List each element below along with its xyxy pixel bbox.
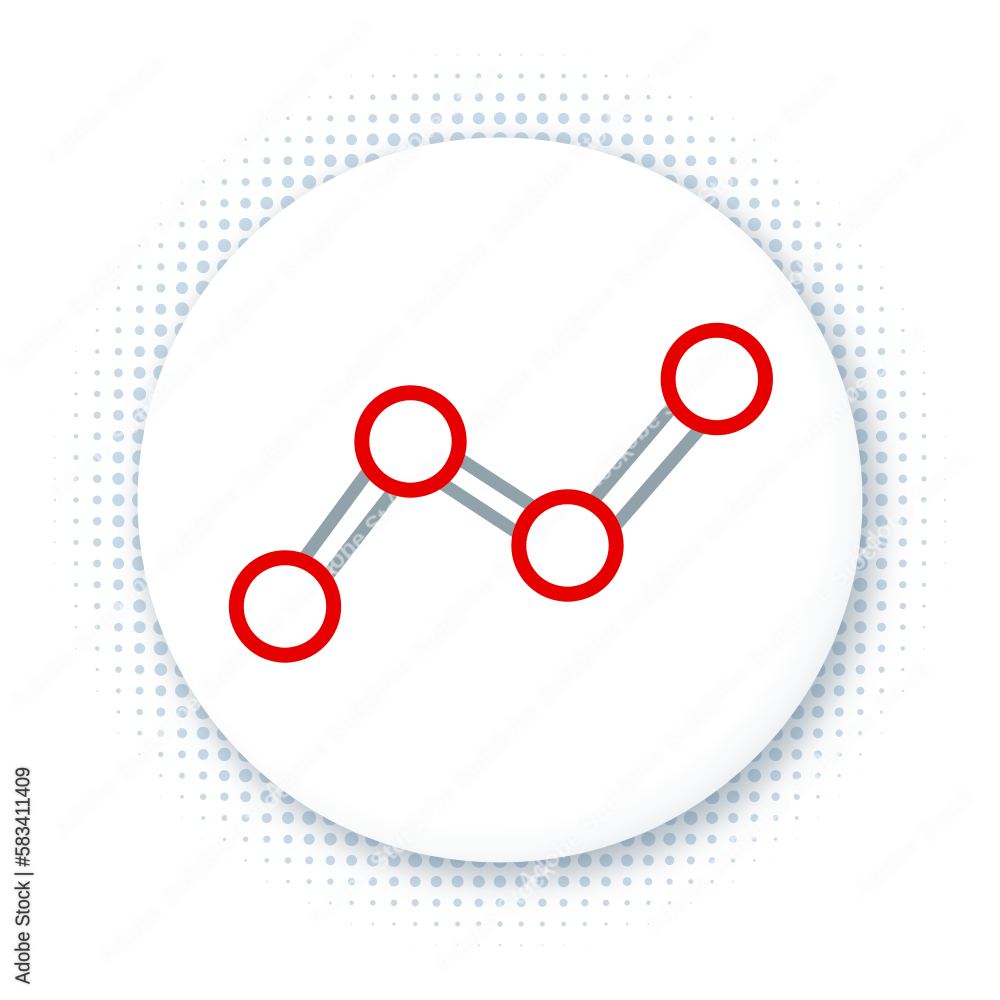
watermark pattern: Adobe Stock bbox=[341, 601, 473, 725]
watermark pattern: Adobe Stock bbox=[380, 392, 512, 516]
watermark pattern: Adobe Stock bbox=[258, 683, 390, 807]
watermark pattern: Adobe Stock bbox=[673, 273, 805, 397]
halftone dot ring background bbox=[54, 54, 946, 946]
watermark pattern: Adobe Stock bbox=[507, 437, 639, 561]
watermark pattern: Adobe Stock bbox=[297, 474, 429, 598]
watermark pattern: Adobe Stock bbox=[585, 19, 717, 143]
watermark pattern: Adobe Stock bbox=[629, 146, 761, 270]
watermark pattern: Adobe Stock bbox=[678, 609, 810, 733]
white circular badge with drop shadow bbox=[138, 138, 862, 862]
watermark pattern: Adobe Stock bbox=[805, 654, 937, 778]
watermark pattern: Adobe Stock bbox=[82, 175, 214, 299]
watermark pattern: Adobe Stock bbox=[639, 818, 771, 942]
watermark pattern: Adobe Stock bbox=[761, 527, 893, 651]
watermark pattern: Adobe Stock bbox=[419, 183, 551, 307]
watermark pattern: Adobe Stock bbox=[375, 56, 507, 180]
watermark pattern: Adobe Stock bbox=[595, 691, 727, 815]
watermark pattern: Adobe Stock bbox=[385, 728, 517, 852]
node 1 bbox=[236, 558, 334, 655]
watermark pattern: Adobe Stock bbox=[839, 109, 971, 233]
watermark pattern: Adobe Stock bbox=[844, 445, 976, 569]
watermark pattern: Adobe Stock bbox=[170, 429, 302, 553]
watermark pattern: Adobe Stock bbox=[0, 257, 131, 381]
watermark pattern: Adobe Stock bbox=[512, 773, 644, 897]
watermark pattern: Adobe Stock bbox=[849, 781, 981, 905]
watermark pattern: Adobe Stock bbox=[87, 511, 219, 635]
watermark pattern: Adobe Stock bbox=[336, 265, 468, 389]
connector: node 2 to node 3 bbox=[443, 458, 532, 532]
watermark pattern: Adobe Stock bbox=[292, 138, 424, 262]
watermark pattern: Adobe Stock bbox=[126, 302, 258, 426]
watermark pattern: Adobe Stock bbox=[722, 736, 854, 860]
watermark pattern: Adobe Stock bbox=[634, 482, 766, 606]
watermark pattern: Adobe Stock bbox=[43, 384, 175, 508]
watermark pattern: Adobe Stock bbox=[800, 318, 932, 442]
watermark pattern: Adobe Stock bbox=[38, 48, 170, 172]
watermark pattern: Adobe Stock bbox=[248, 11, 380, 135]
watermark pattern: Adobe Stock bbox=[551, 564, 683, 688]
watermark pattern: Adobe Stock bbox=[48, 720, 180, 844]
watermark pattern: Adobe Stock bbox=[165, 93, 297, 217]
watermark pattern: Adobe Stock bbox=[424, 519, 556, 643]
watermark pattern: Adobe Stock bbox=[590, 355, 722, 479]
node 4 bbox=[668, 330, 766, 428]
watermark pattern: Adobe Stock bbox=[209, 220, 341, 344]
node 3 bbox=[519, 497, 616, 594]
node 2 bbox=[362, 393, 459, 490]
watermark pattern: Adobe Stock bbox=[302, 810, 434, 934]
connector: node 3 to node 4 bbox=[594, 408, 700, 525]
watermark pattern: Adobe Stock bbox=[468, 646, 600, 770]
watermark pattern: Adobe Stock bbox=[463, 310, 595, 434]
watermark pattern: Adobe Stock bbox=[92, 847, 224, 971]
watermark pattern: Adobe Stock bbox=[214, 556, 346, 680]
watermark pattern: Adobe Stock bbox=[175, 765, 307, 889]
watermark pattern: Adobe Stock bbox=[4, 593, 136, 717]
watermark pattern: Adobe Stock bbox=[502, 101, 634, 225]
watermark pattern: Adobe Stock bbox=[546, 228, 678, 352]
watermark pattern: Adobe Stock bbox=[429, 855, 561, 979]
watermark pattern: Adobe Stock bbox=[712, 64, 844, 188]
watermark pattern: Adobe Stock bbox=[717, 400, 849, 524]
connector: node 1 to node 2 bbox=[303, 473, 393, 575]
vertical stock id caption: Adobe Stock | #583411409 bbox=[12, 767, 34, 984]
watermark pattern: Adobe Stock bbox=[756, 191, 888, 315]
watermark pattern: Adobe Stock bbox=[253, 347, 385, 471]
watermark pattern: Adobe Stock bbox=[131, 638, 263, 762]
